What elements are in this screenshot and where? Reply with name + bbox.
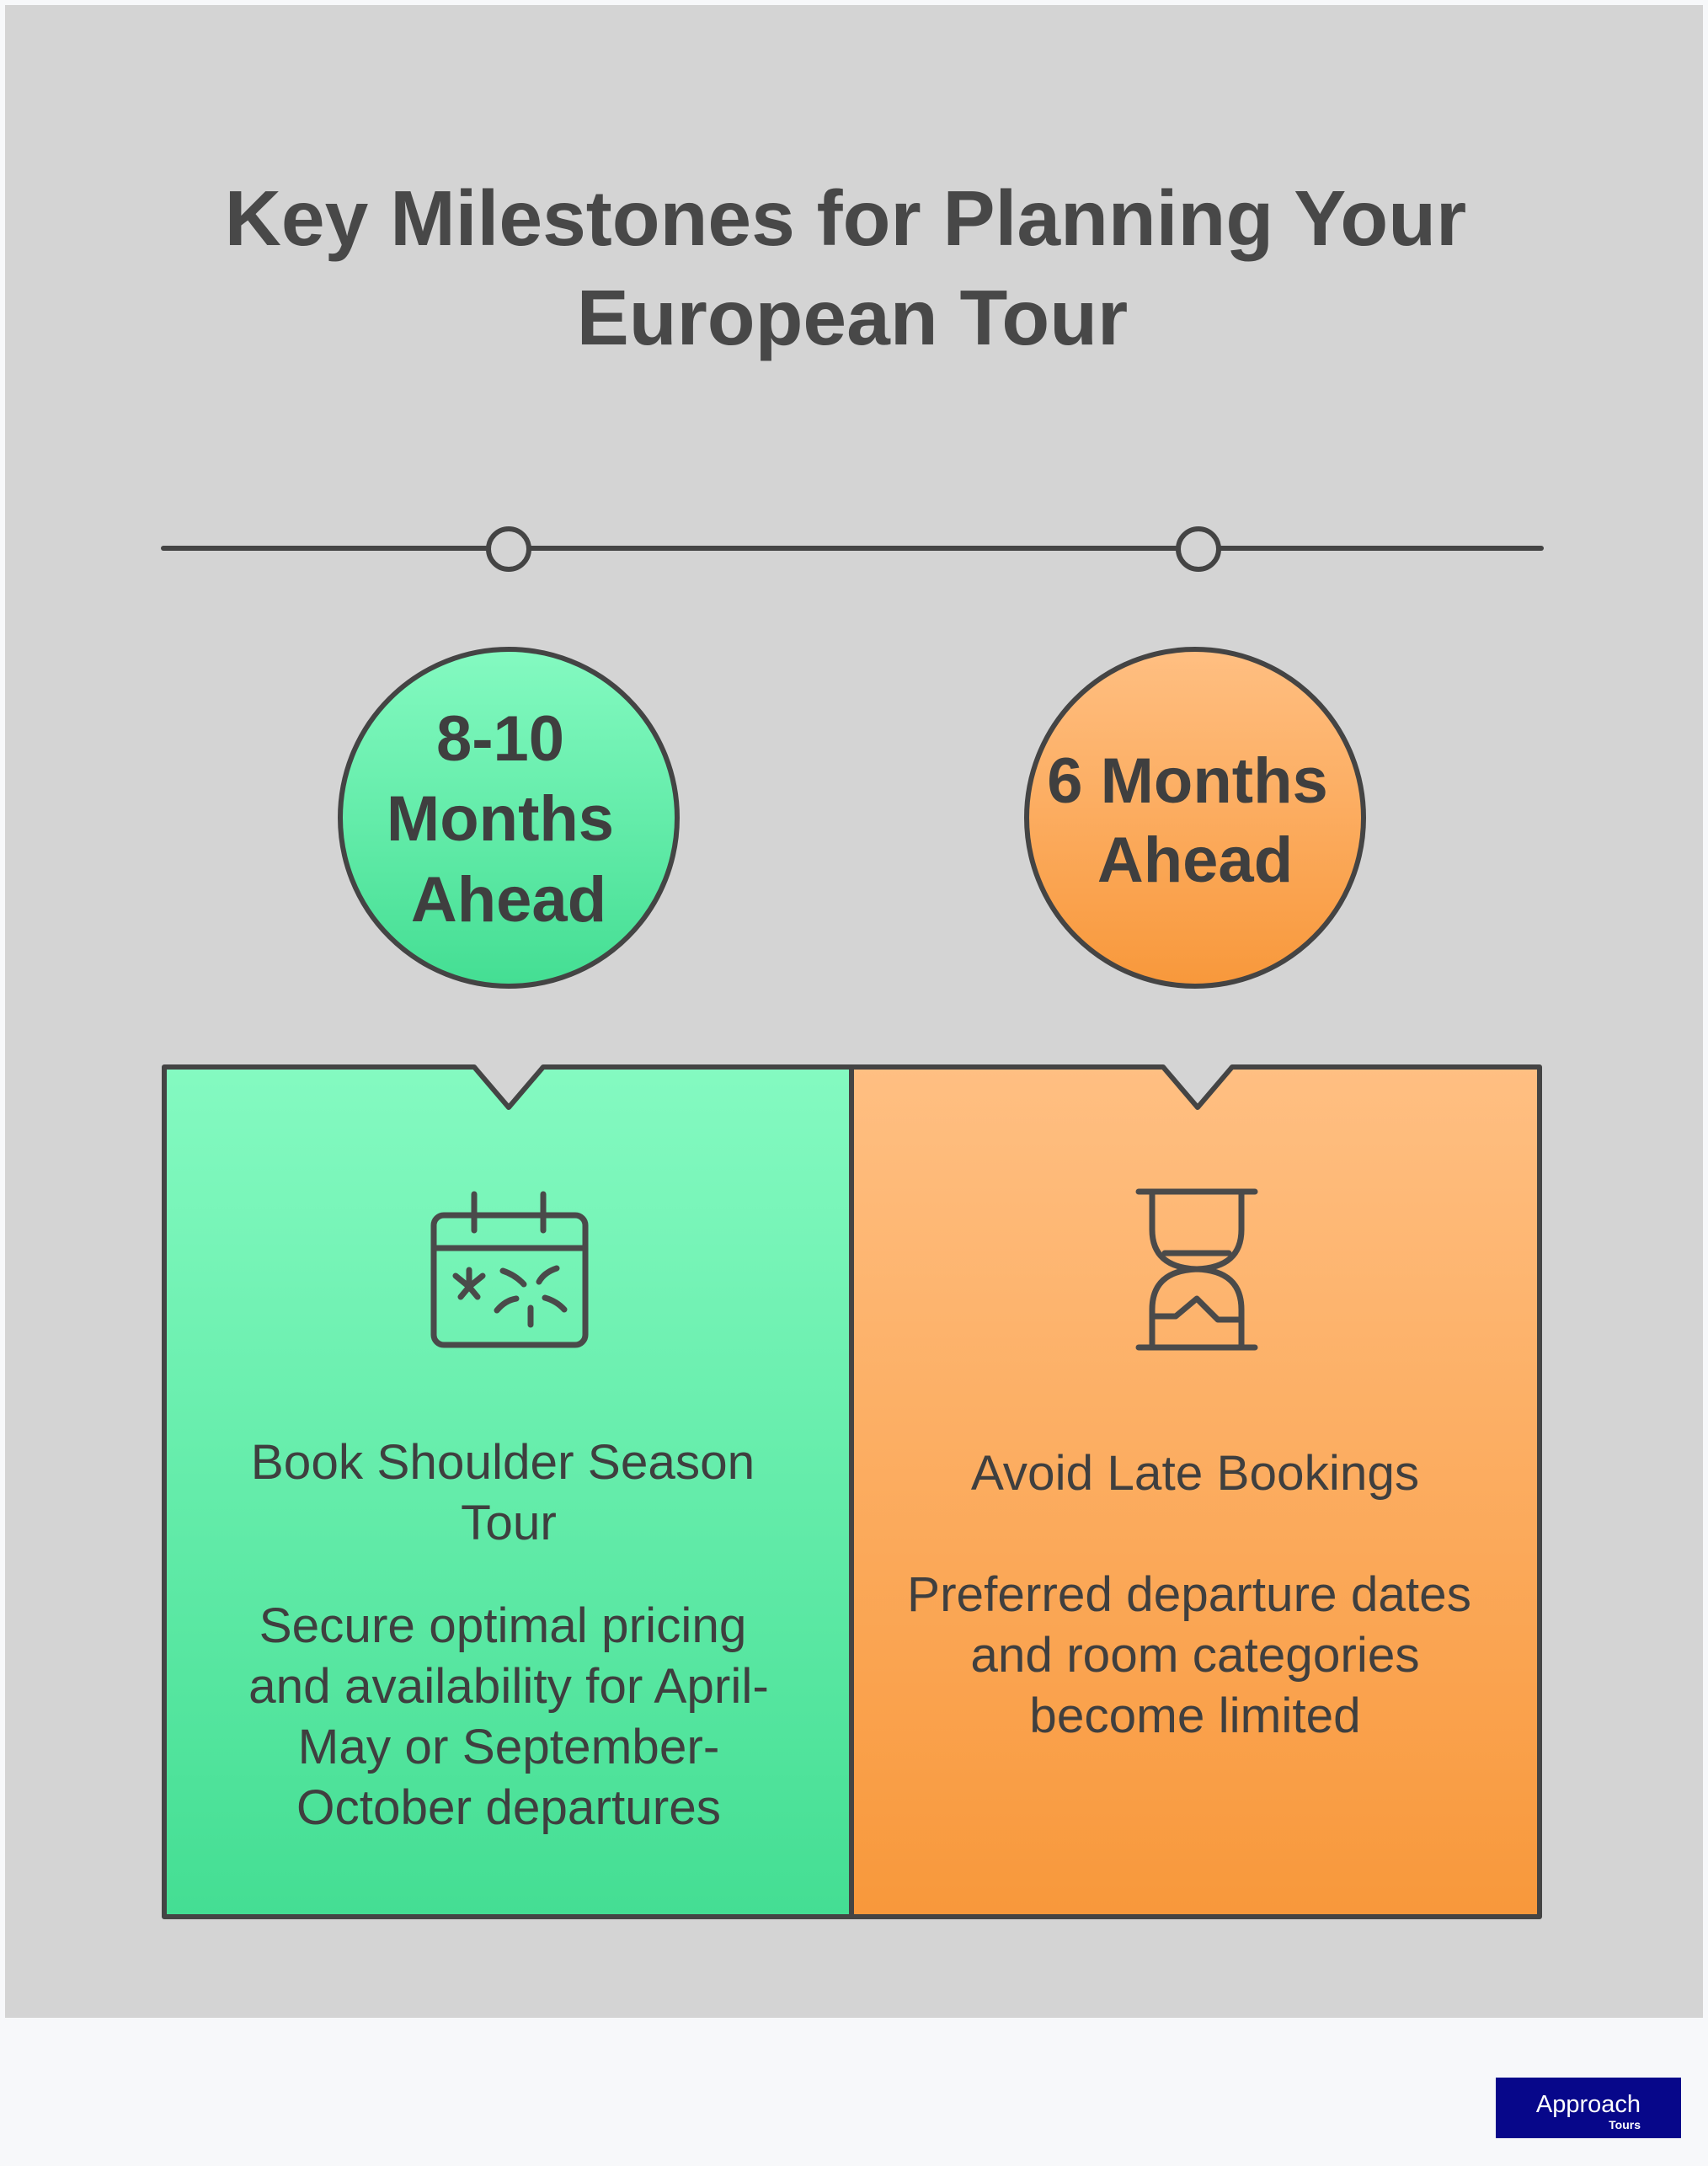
text: late bookings: Preferred departure dates: [907, 1567, 1471, 1622]
text: late bookings: and room categories: [970, 1628, 1420, 1683]
milestone circle: 6 months: [1027, 649, 1364, 986]
text: shoulder season: Tour: [461, 1496, 557, 1550]
panel: late bookings: [851, 1067, 1540, 1917]
text: late bookings: [907, 1446, 1471, 1743]
logo: [1496, 2078, 1681, 2138]
title: European Tour: [577, 274, 1128, 361]
timeline: [163, 529, 1541, 569]
milestone circle: 8-10 months: Ahead: [411, 864, 606, 936]
milestone circle: 6 months: 6 Months: [1047, 745, 1328, 817]
milestone circle: 8-10 months: 8-10: [436, 703, 564, 775]
text: shoulder season: May or September-: [298, 1720, 719, 1774]
text: shoulder season: [248, 1435, 769, 1835]
milestone circle: 8-10 months: Months: [387, 783, 614, 855]
logo: Tours: [1609, 2118, 1641, 2131]
panel: shoulder season: [164, 1067, 851, 1917]
logo: Approach: [1536, 2091, 1641, 2118]
text: shoulder season: and availability for April-: [248, 1659, 769, 1714]
text: shoulder season: Book Shoulder Season: [251, 1435, 755, 1490]
title: [225, 174, 1466, 361]
text: late bookings: become limited: [1029, 1689, 1361, 1743]
milestone circle: 6 months: Ahead: [1097, 824, 1293, 896]
icon: hourglass: [1139, 1192, 1255, 1347]
text: shoulder season: Secure optimal pricing: [259, 1598, 746, 1653]
text: shoulder season: October departures: [296, 1780, 721, 1835]
text: late bookings: Avoid Late Bookings: [971, 1446, 1419, 1501]
milestone circle: 8-10 months: [340, 649, 677, 986]
title: Key Milestones for Planning Your: [225, 174, 1466, 262]
icon: calendar: [434, 1194, 585, 1345]
